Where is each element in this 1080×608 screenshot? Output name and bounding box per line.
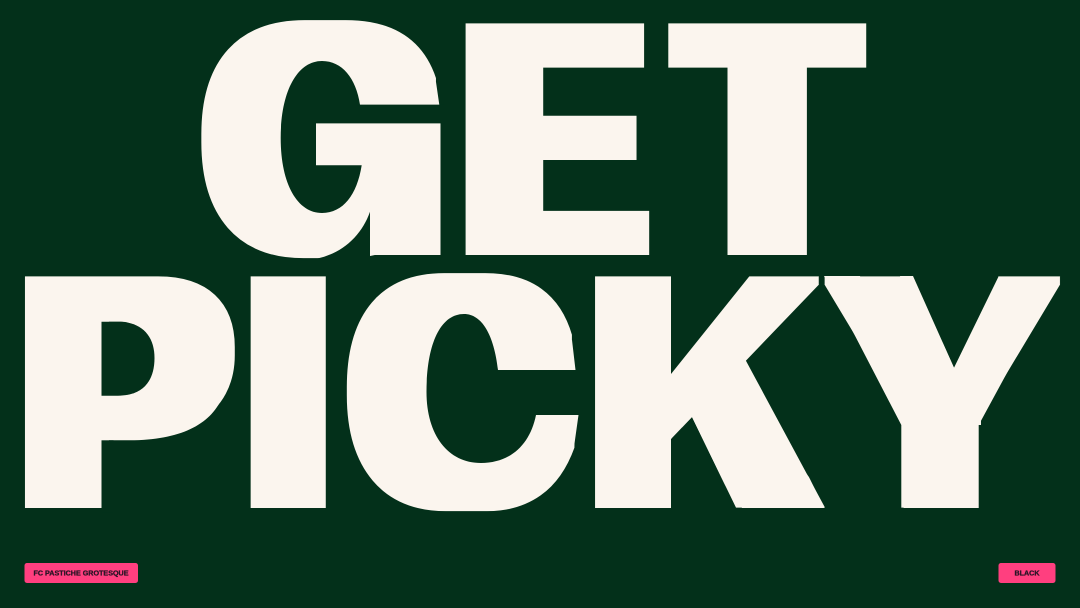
headline line: PICKY: C	[356, 210, 562, 573]
tag: font weight	[998, 563, 1056, 583]
headline line: PICKY: I	[255, 211, 321, 574]
headline line: PICKY	[26, 210, 1059, 574]
headline line: PICKY: Y	[834, 210, 1050, 573]
headline line: PICKY: P	[26, 211, 225, 574]
tag: font name: FC PASTICHE GROTESQUE	[34, 570, 129, 578]
headline line: PICKY: K	[590, 211, 813, 574]
headline line: GET	[210, 0, 849, 320]
tag: font weight: BLACK	[1014, 570, 1040, 578]
tag: font name	[24, 563, 138, 583]
